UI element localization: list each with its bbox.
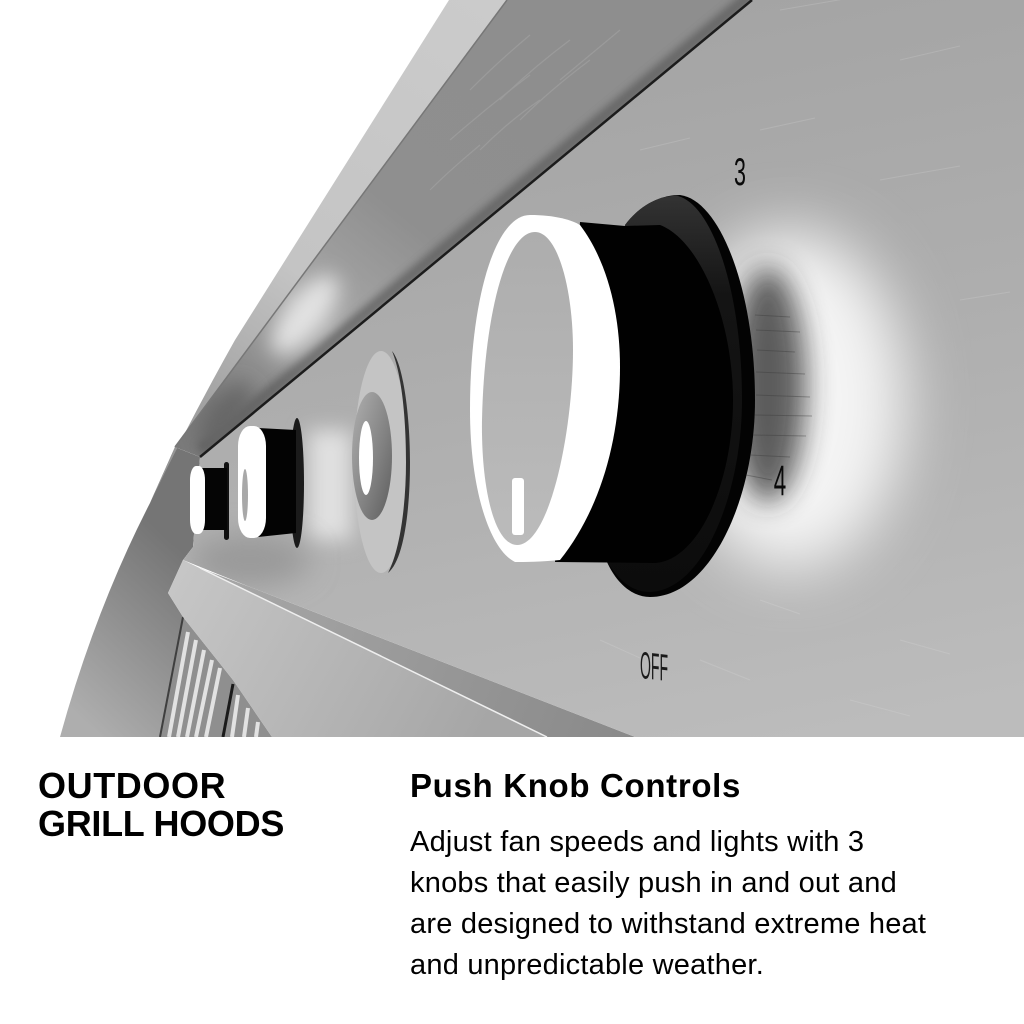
product photo: hood control panel (60, 0, 1024, 737)
hood upper sloped panel (175, 0, 752, 457)
glow on panel (675, 230, 905, 570)
lip front face (168, 560, 547, 737)
large knob (470, 195, 755, 597)
lower hood lip and vents (160, 560, 635, 737)
dark seam between panels (200, 0, 752, 457)
scale numeral 4: 4 (774, 457, 786, 505)
feature description: Adjust fan speeds and lights with 3 (410, 826, 864, 858)
second knob (238, 418, 304, 548)
feature description: are designed to withstand extreme heat (410, 908, 926, 940)
feature description (410, 826, 926, 981)
vents (160, 617, 272, 737)
heading: product category: OUTDOOR (38, 765, 226, 806)
heading: product category (38, 765, 284, 844)
knob black body (555, 222, 733, 563)
feature description: and unpredictable weather. (410, 949, 764, 981)
hood side panel (60, 447, 200, 737)
feature heading: Push Knob Controls (410, 767, 741, 804)
heading: product category: GRILL HOODS (38, 803, 284, 844)
metal strip (205, 570, 635, 737)
knob indicator (512, 478, 524, 535)
hood front control panel (183, 0, 1024, 737)
reflection by fixture (308, 430, 352, 540)
small knob far left (190, 462, 229, 540)
knob mounting flange (607, 195, 755, 597)
lip highlight (200, 568, 547, 737)
knob inner face (482, 232, 573, 545)
vent light fixture (352, 351, 410, 573)
scale label OFF: OFF (640, 645, 668, 690)
scale numeral 3: 3 (734, 150, 746, 194)
line between band and upper panel (175, 0, 507, 447)
knob white ring (470, 215, 620, 562)
shadow behind large knob (730, 267, 806, 503)
hood light edge band (150, 0, 507, 503)
feature description: knobs that easily push in and out and (410, 867, 897, 899)
hair-like shadow streaks (746, 315, 812, 480)
